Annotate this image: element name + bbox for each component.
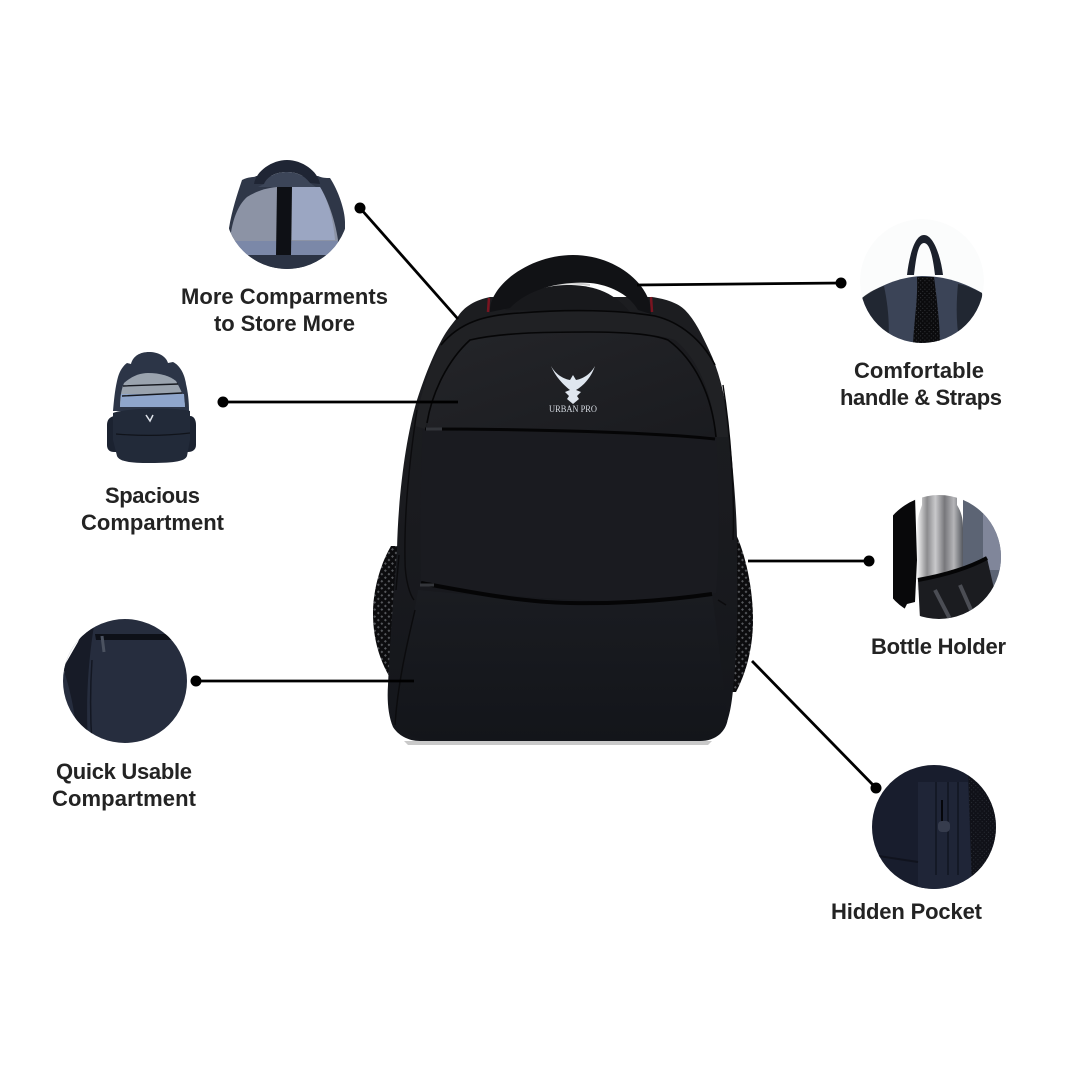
icon: more compartments photo: [228, 160, 345, 269]
handle: [490, 255, 651, 314]
lower zipper: [421, 583, 712, 603]
label: more compartments: More Comparments: [181, 284, 388, 309]
zipper pulls: [420, 429, 442, 585]
upper zipper: [425, 429, 715, 439]
icon: spacious compartment photo: [107, 352, 196, 463]
top flap: [415, 311, 728, 437]
red piping: [488, 297, 652, 312]
handle base: [505, 285, 630, 312]
front middle panel: [420, 429, 719, 601]
handle highlight sliver: [552, 282, 590, 286]
seams: [441, 311, 715, 365]
connector: quick usable compartment: [190, 676, 414, 686]
label: quick usable compartment: Quick Usable: [56, 759, 192, 784]
bag floor shadow: [404, 741, 712, 745]
connector: spacious compartment: [218, 396, 458, 408]
connector: hidden pocket: [752, 661, 882, 794]
label: quick usable compartment: Compartment: [52, 786, 197, 811]
icon: bottle holder photo: [893, 495, 1001, 619]
icon: hidden pocket photo: [872, 765, 996, 889]
left mesh side pocket: [373, 546, 402, 676]
label: more compartments: to Store More: [214, 311, 355, 336]
label: comfortable handle and straps: handle & Straps: [840, 385, 1002, 410]
front upper panel: [427, 332, 716, 437]
bag body: [388, 297, 737, 741]
right mesh side pocket: [725, 532, 753, 692]
label: spacious compartment: Compartment: [81, 510, 225, 535]
label: quick usable compartment: [52, 759, 197, 811]
brand logo: [549, 366, 597, 415]
label: spacious compartment: [81, 483, 225, 535]
label: comfortable handle and straps: Comfortable: [854, 358, 984, 383]
logo wordmark: URBAN PRO: [549, 405, 597, 415]
connector: handle and straps: [637, 278, 846, 288]
label: hidden pocket: Hidden Pocket: [831, 899, 983, 924]
icon: comfortable handle and straps photo: [862, 235, 982, 343]
connector: more compartments: [354, 202, 458, 319]
icon: quick usable compartment photo: [63, 619, 187, 743]
front lower pocket: [396, 590, 728, 740]
label: bottle holder: Bottle Holder: [871, 634, 1006, 659]
main backpack: [373, 255, 753, 745]
label: comfortable handle and straps: [840, 358, 1002, 410]
label: spacious compartment: Spacious: [105, 483, 200, 508]
label: more compartments: [181, 284, 388, 336]
connector: bottle holder: [748, 556, 874, 566]
eagle emblem: [551, 366, 595, 404]
